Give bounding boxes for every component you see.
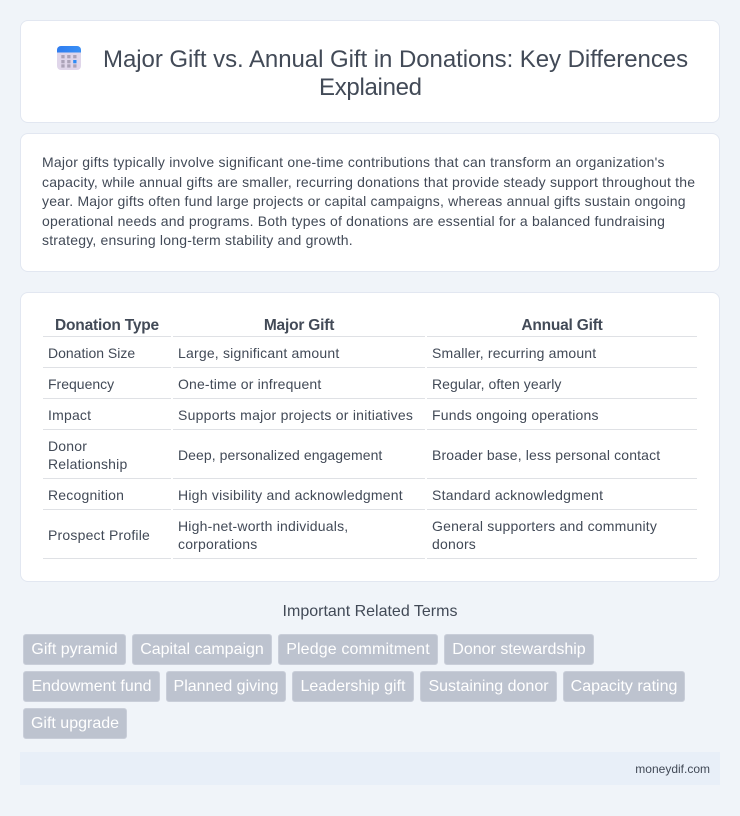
text block: introduction: Major gifts typically involve significant one-time contributions that can transform an organization's: [42, 154, 665, 170]
tag: [166, 671, 286, 702]
row: Impact: Funds ongoing operations: [432, 407, 599, 423]
tag: Planned giving: [174, 678, 278, 695]
text block: introduction: capacity, while annual gifts are smaller, recurring donations that provide steady support throughout the: [42, 174, 695, 190]
panel: comparison table: [20, 292, 720, 582]
row: Donor Relationship: [43, 438, 697, 479]
tag: Gift upgrade: [31, 715, 119, 732]
row: Impact: [43, 407, 697, 430]
row: Recognition: High visibility and acknowledgment: [178, 487, 403, 503]
title: [103, 46, 688, 101]
row: Impact: Impact: [48, 407, 91, 423]
text block: introduction: year. Major gifts often fund large projects or capital campaigns, whereas annual gifts sustain ongoing: [42, 193, 686, 209]
row: Donor Relationship: Relationship: [48, 456, 127, 472]
tag: [23, 634, 126, 665]
tag: Capacity rating: [571, 678, 677, 695]
tag: Capital campaign: [140, 641, 264, 658]
row: Prospect Profile: corporations: [178, 536, 257, 552]
tag: [132, 634, 272, 665]
tag: Pledge commitment: [286, 641, 430, 658]
row: Recognition: [43, 487, 697, 510]
row: Recognition: Standard acknowledgment: [432, 487, 603, 503]
row: Recognition: Recognition: [48, 487, 124, 503]
tag: Sustaining donor: [428, 678, 549, 695]
tag: [563, 671, 685, 702]
row: Frequency: Frequency: [48, 376, 114, 392]
row: Prospect Profile: General supporters and community: [432, 518, 657, 534]
row: Donor Relationship: Broader base, less personal contact: [432, 447, 660, 463]
text block: introduction: strategy, ensuring long-term stability and growth.: [42, 232, 353, 248]
tag: [444, 634, 594, 665]
footer: site name: moneydif.com: [635, 762, 710, 776]
row: Donation Size: [43, 345, 697, 368]
title: Explained: [319, 74, 422, 101]
tag: [23, 671, 160, 702]
row: Donor Relationship: Deep, personalized engagement: [178, 447, 382, 463]
tag: Gift pyramid: [31, 641, 118, 658]
row: Prospect Profile: donors: [432, 536, 476, 552]
table header: Donation Type: [55, 317, 159, 334]
row: Donation Size: Smaller, recurring amount: [432, 345, 596, 361]
table header: Major Gift: [264, 317, 334, 334]
tags: related terms: [23, 634, 685, 739]
row: Donation Size: Donation Size: [48, 345, 135, 361]
row: Frequency: Regular, often yearly: [432, 376, 561, 392]
tag: [278, 634, 438, 665]
footer: [20, 752, 720, 785]
tag: Endowment fund: [31, 678, 152, 695]
row: Prospect Profile: Prospect Profile: [48, 527, 150, 543]
tag: Leadership gift: [301, 678, 405, 695]
table header: [43, 317, 697, 337]
row: Donation Size: Large, significant amount: [178, 345, 339, 361]
row: Impact: Supports major projects or initiatives: [178, 407, 413, 423]
tag: [420, 671, 557, 702]
row: Prospect Profile: [43, 518, 697, 559]
panel: introduction: [20, 133, 720, 272]
panel: header: [20, 20, 720, 123]
text block: introduction: operational needs and programs. Both types of donations are essential for a balanced fundraising: [42, 213, 665, 229]
row: Frequency: [43, 376, 697, 399]
heading: related terms: Important Related Terms: [283, 603, 457, 620]
icon: calendar: [57, 46, 81, 70]
text block: introduction: [42, 154, 695, 248]
row: Prospect Profile: High-net-worth individuals,: [178, 518, 348, 534]
tag: [292, 671, 414, 702]
row: Frequency: One-time or infrequent: [178, 376, 321, 392]
tag: [23, 708, 127, 739]
title: Major Gift vs. Annual Gift in Donations: Key Differences: [103, 46, 688, 73]
table header: Annual Gift: [521, 317, 603, 334]
tag: Donor stewardship: [452, 641, 586, 658]
row: Donor Relationship: Donor: [48, 438, 87, 454]
